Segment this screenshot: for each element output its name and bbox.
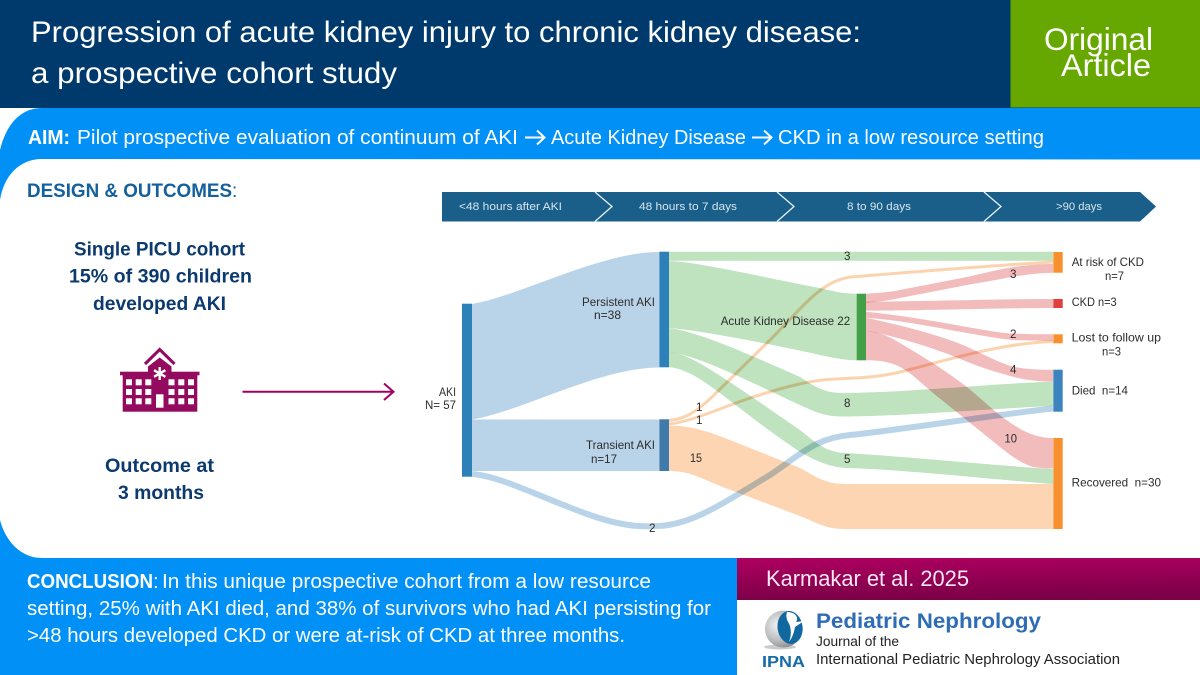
sankey labels: 1 — [696, 401, 702, 414]
header band — [0, 0, 1200, 108]
aim statement — [28, 126, 1044, 149]
sankey labels: n=3 — [1102, 346, 1121, 359]
conclusion: setting, 25% with AKI died, and 38% of survivors who had AKI persisting for — [27, 597, 711, 620]
panel: original article badge: Article — [1061, 47, 1151, 83]
sankey labels: 15 — [690, 452, 702, 465]
heading: design and outcomes: DESIGN & OUTCOMES — [27, 181, 232, 202]
text: outcome timing: 3 months — [118, 482, 204, 504]
conclusion: >48 hours developed CKD or were at-risk of CKD at three months. — [27, 624, 625, 647]
sankey labels: 2 — [649, 522, 655, 535]
aim statement: Pilot prospective evaluation of continuum of AKI — [77, 126, 518, 149]
citation banner — [737, 558, 1200, 600]
sankey labels: CKD n=3 — [1072, 296, 1117, 309]
conclusion: In this unique prospective cohort from a low resource — [162, 570, 651, 593]
panel: journal footer — [737, 600, 1200, 675]
sankey chart — [425, 250, 1161, 535]
sankey labels: n=7 — [1105, 270, 1124, 283]
arrow: cohort to sankey — [242, 384, 394, 400]
sankey labels: Transient AKI — [586, 439, 655, 452]
sankey labels: Recovered n=30 — [1072, 477, 1161, 490]
timeline chevron header: 48 hours to 7 days — [639, 201, 737, 213]
sankey labels: 4 — [1010, 364, 1017, 377]
journal name: Pediatric Nephrology — [816, 609, 1041, 633]
sankey labels: 3 — [1010, 268, 1016, 281]
journal name: Journal of the — [816, 633, 899, 649]
aim statement: Acute Kidney Disease — [551, 126, 746, 149]
sankey labels: 3 — [844, 250, 850, 263]
citation banner: Karmakar et al. 2025 — [766, 566, 969, 591]
sankey labels — [425, 250, 1161, 535]
conclusion: CONCLUSION — [27, 570, 153, 593]
text: cohort: Single PICU cohort — [74, 238, 245, 260]
sankey labels: At risk of CKD — [1072, 256, 1144, 269]
panel: original article badge: Original — [1044, 21, 1153, 57]
text: cohort — [69, 238, 252, 315]
sankey labels: Acute Kidney Disease 22 — [721, 315, 850, 328]
sankey labels: Lost to follow up — [1072, 332, 1161, 345]
icon: IPNA logo: IPNA — [762, 654, 805, 671]
sankey labels: 8 — [844, 397, 850, 410]
aim statement: CKD in a low resource setting — [778, 126, 1044, 149]
sankey labels: 5 — [844, 453, 850, 466]
text: outcome timing: Outcome at — [105, 455, 215, 477]
sankey labels: N= 57 — [425, 399, 456, 412]
panel: design and outcomes — [0, 159, 1200, 558]
sankey labels: AKI — [439, 386, 456, 399]
timeline chevron header: 8 to 90 days — [847, 201, 911, 213]
conclusion: : — [153, 570, 159, 593]
heading: design and outcomes: : — [232, 181, 237, 202]
journal name — [816, 609, 1120, 668]
sankey labels: n=38 — [594, 309, 621, 322]
panel: original article badge — [1010, 0, 1200, 108]
conclusion — [27, 570, 711, 647]
text: cohort: 15% of 390 children — [69, 266, 252, 288]
title — [31, 16, 861, 90]
icon: hospital — [120, 350, 200, 412]
sankey labels: 1 — [696, 414, 702, 427]
timeline chevron header: >90 days — [1056, 201, 1102, 213]
timeline chevron header: <48 hours after AKI — [459, 201, 562, 213]
icon: IPNA logo — [762, 609, 805, 671]
title: a prospective cohort study — [31, 57, 397, 90]
sankey labels: Persistent AKI — [582, 296, 655, 309]
sankey labels: n=17 — [591, 453, 617, 466]
text: outcome timing — [105, 455, 215, 504]
text: cohort: developed AKI — [93, 293, 226, 315]
aim statement: AIM: — [28, 126, 70, 149]
timeline chevron header — [442, 192, 1156, 222]
sankey nodes — [462, 252, 1063, 529]
sankey labels: 10 — [1004, 433, 1017, 446]
journal name: International Pediatric Nephrology Association — [816, 652, 1120, 668]
sankey labels: 2 — [1010, 328, 1016, 341]
sankey flows — [472, 252, 1053, 529]
sankey labels: Died n=14 — [1072, 385, 1129, 398]
title: Progression of acute kidney injury to chronic kidney disease: — [31, 16, 861, 49]
